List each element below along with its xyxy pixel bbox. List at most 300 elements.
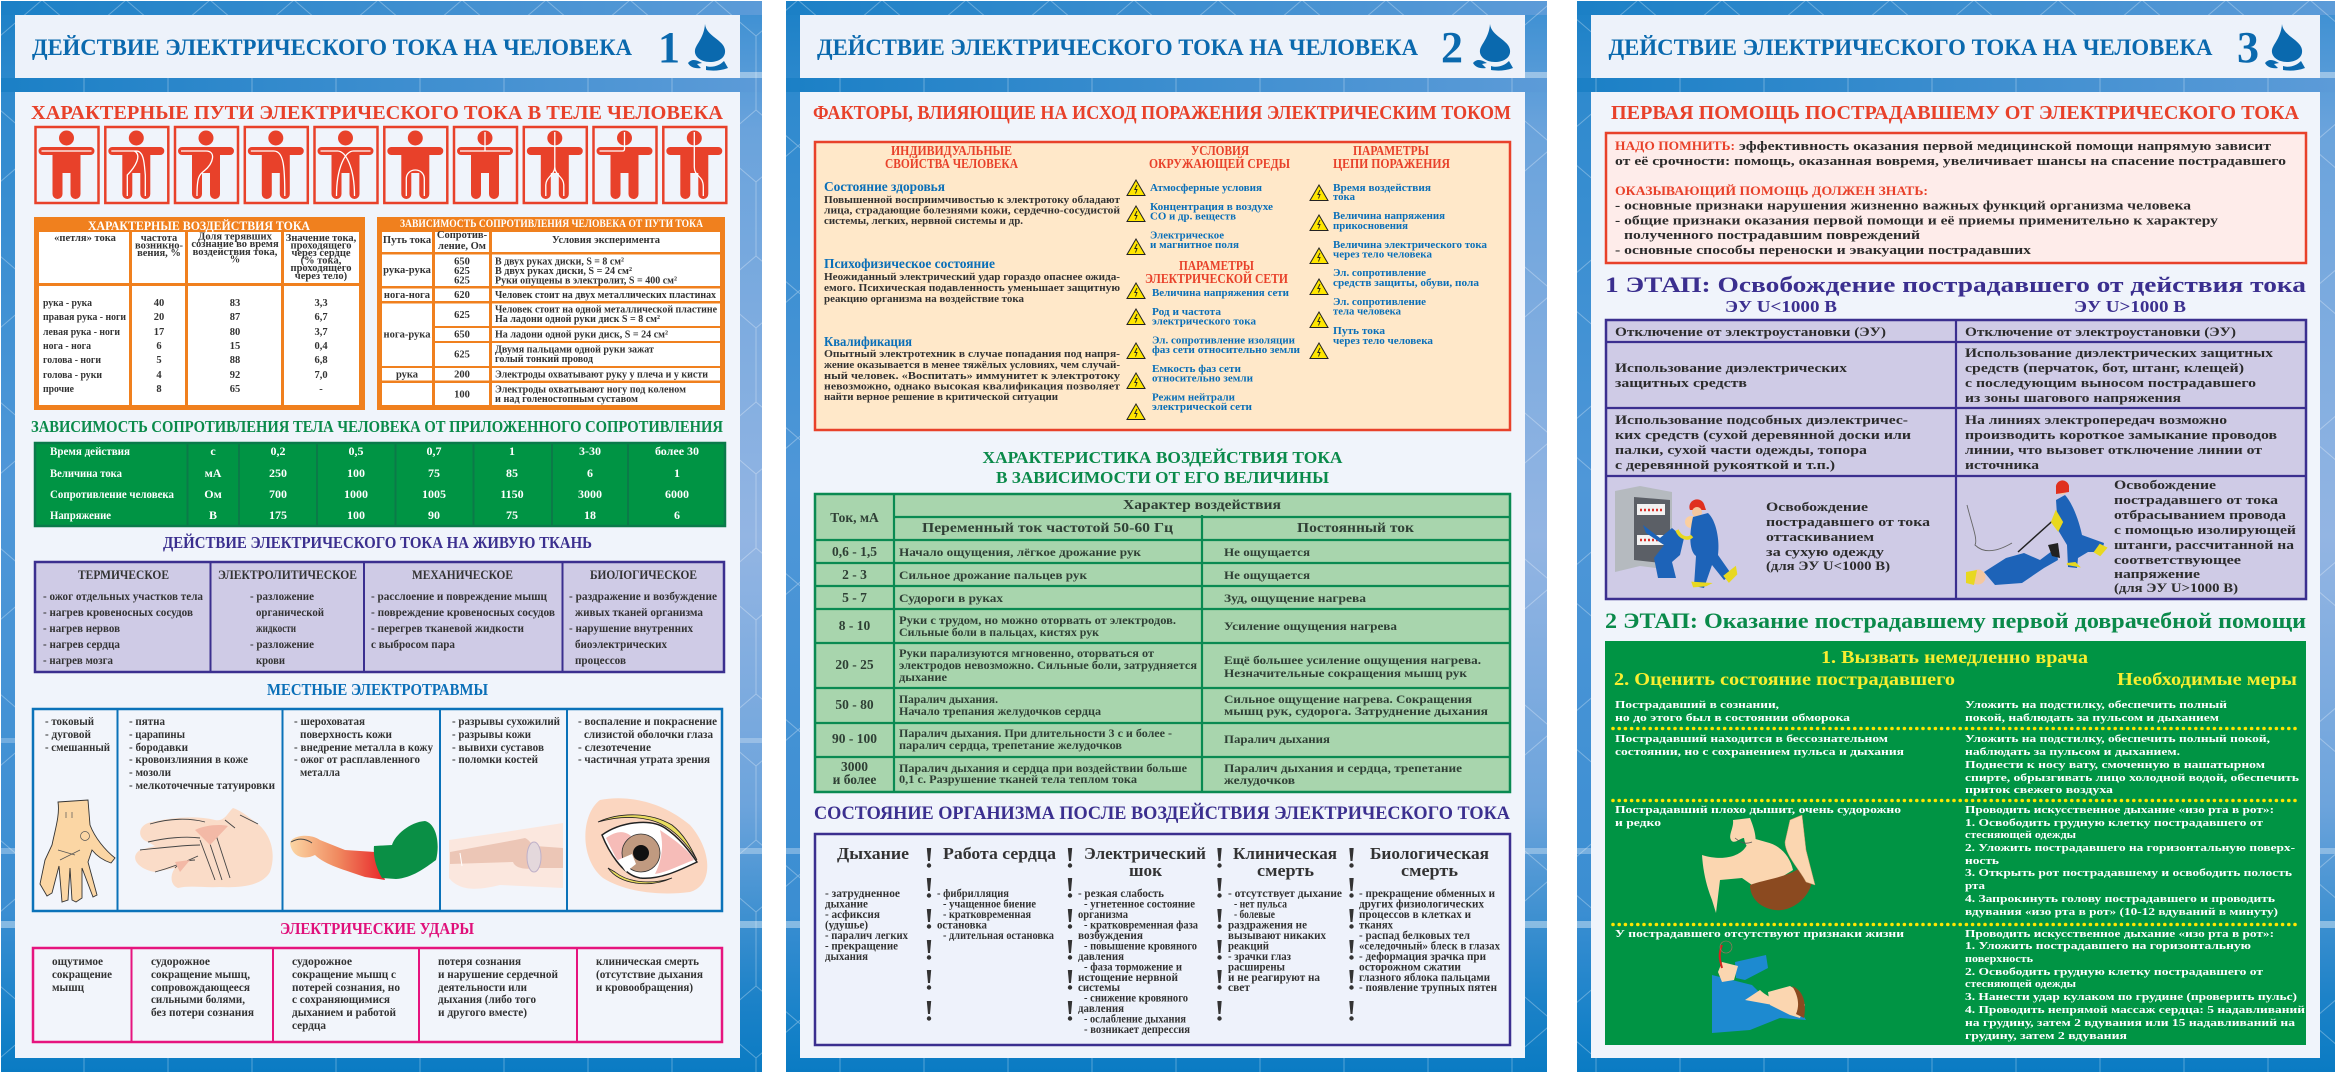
illustration: burned hand [40,800,115,902]
table: exposure time, current, resistance, voltage: Величина тока [50,466,122,480]
table: effect by current magnitude: Сильное дрожание пальцев рук [899,568,1087,582]
panel: factors box: через тело человека [1333,248,1432,260]
table: stage 1 actions: из зоны шагового напряжения [1965,390,2181,405]
heading: first aid: ПЕРВАЯ ПОМОЩЬ ПОСТРАДАВШЕМУ ОТ ЭЛЕКТРИЧЕСКОГО ТОКА [1611,102,2300,124]
table: resistance versus current path: рука [396,370,419,380]
callout: remember: эффективность оказания первой медицинской помощи напрямую зависит [1739,138,2272,153]
table: effect by current magnitude: Начало трепания желудочков сердца [899,704,1101,718]
table: exposure time, current, resistance, voltage: 85 [506,466,518,480]
table: thermal, electrolytic, mechanical, biological: - расслоение и повреждение мышц [371,591,547,603]
panel: stage 2 measures: 1. Уложить пострадавшего на горизонтальную [1965,940,2251,952]
table: characteristic effects of current [34,217,365,410]
table: thermal, electrolytic, mechanical, biological: живых тканей организма [575,607,703,619]
table: exposure time, current, resistance, voltage: 1150 [500,487,524,501]
panel: factors box: Эл. сопротивление изоляции [1152,334,1296,346]
panel: stage 2 measures: Необходимые меры [2117,669,2297,689]
icon: flame logo [688,24,728,71]
table: effect by current magnitude: 2 - 3 [842,567,867,582]
table: characteristic effects of current: 80 [230,327,240,338]
panel: organism states columns: других физиологических [1359,898,1484,910]
table: stage 1 actions: с последующим выносом пострадавшего [1965,375,2256,390]
table: local injuries with illustrations: - разрывы сухожилий [452,716,560,728]
table: characteristic effects of current: 5 [156,355,162,366]
table: characteristic effects of current: 3,7 [314,327,328,338]
illustration: dislocated joint [449,823,563,889]
panel: stage 2 measures: покой, наблюдать за пульсом и дыханием [1965,712,2220,724]
panel: organism states columns: - затрудненное [825,888,900,900]
panel: factors box: ПАРАМЕТРЫ [1179,258,1255,273]
table: effect by current magnitude: мышц рук, судорога. Затруднение дыхания [1224,704,1489,718]
panel: factors box: СВОЙСТВА ЧЕЛОВЕКА [885,156,1018,171]
table: effect by current magnitude: 50 - 80 [835,697,874,712]
table: local injuries with illustrations: - мозоли [129,767,171,779]
panel: stage 2 measures: стесняющей одежды [1965,978,2076,990]
table: characteristic effects of current: 6 [156,341,162,352]
table: stage 1 actions: Использование диэлектрических [1615,360,1848,375]
table: characteristic effects of current: Доля терявших [198,232,273,242]
panel: factors box: жение оказывается в менее тяжёлых условиях, чем случай- [824,360,1121,371]
table: local injuries with illustrations: - частичная утрата зрения [578,754,710,766]
table: local injuries with illustrations: - внедрение металла в кожу [294,742,433,754]
header title 2: ДЕЙСТВИЕ ЭЛЕКТРИЧЕСКОГО ТОКА НА ЧЕЛОВЕКА [817,35,1418,60]
table: stage 1 actions [1606,320,2306,599]
table: resistance versus current path: ление, Ом [438,241,486,252]
table: exposure time, current, resistance, voltage: 18 [584,508,596,522]
panel: factors box: Время воздействия [1333,182,1431,194]
heading: stage 1 [1605,272,2306,316]
table: electric shock severities [33,948,722,1042]
table: stage 1 actions: Отключение от электроустановки (ЭУ) [1615,324,1886,339]
table: resistance versus current path: Двумя пальцами одной руки зажат [495,344,655,356]
table: resistance versus current path: и над голеностопным суставом [495,394,638,405]
table: characteristic effects of current: воздействия тока, [193,247,278,258]
table: thermal, electrolytic, mechanical, biological: - нагрев кровеносных сосудов [43,607,193,619]
panel: stage 2 measures: спирте, обрызгивать лицо холодной водой, обеспечить [1965,772,2299,784]
table: local injuries with illustrations: - пятна [129,716,165,728]
table: resistance versus current path: На ладони одной руки диск, S = 24 см² [495,330,668,340]
panel: organism states columns: - деформация зрачка при [1359,951,1486,963]
panel: stage 2 measures: 3. Нанести удар кулаком по грудине (проверить пульс) [1965,991,2297,1003]
panel: organism states columns: - кратковременная [943,909,1031,921]
table: effect by current magnitude: Ещё большее усиление ощущения нагрева. [1224,653,1481,667]
table: effect by current magnitude: Постоянный ток [1297,520,1414,535]
table: thermal, electrolytic, mechanical, biological: - ожог отдельных участков тела [43,591,203,603]
panel: organism states columns: Работа сердца [943,844,1057,863]
header title 2 [817,23,1463,72]
table: electric shock severities: сокращение [52,969,112,981]
table: characteristic effects of current: 6,7 [314,312,328,323]
panel: factors box: Эл. сопротивление [1333,296,1426,308]
panel: stage 2 measures: 2. Уложить пострадавшего на горизонтальную поверх- [1965,842,2295,854]
callout: remember: ОКАЗЫВАЮЩИЙ ПОМОЩЬ ДОЛЖЕН ЗНАТЬ: [1615,183,1928,198]
panel: factors box: Величина электрического тока [1333,239,1487,251]
table: characteristic effects of current: 3,3 [314,298,328,309]
panel: factors box: ПАРАМЕТРЫ [1353,143,1430,158]
table: effect by current magnitude: 8 - 10 [839,618,870,633]
table: local injuries with illustrations: - поломки костей [452,754,538,766]
table: effect by current magnitude: Сильные боли в пальцах, кистях рук [899,625,1099,639]
table: resistance versus current path: Условия эксперимента [552,235,661,246]
callout: remember: - основные способы переноски и эвакуации пострадавших [1615,242,2032,257]
heading: current effect by magnitude: ХАРАКТЕРИСТИКА ВОЗДЕЙСТВИЯ ТОКА [982,448,1343,467]
table: stage 1 actions: средств (перчаток, бот, штанг, клещей) [1965,360,2244,375]
table: electric shock severities: с сохраняющимися [292,994,390,1006]
panel: factors box: прикосновения [1333,220,1408,232]
table: resistance versus current path: 625 [454,266,470,277]
panel: factors box: Неожиданный электрический удар гораздо опаснее ожида- [824,272,1121,283]
table: local injuries with illustrations: - царапины [129,729,185,741]
table: characteristic effects of current: через тело) [295,271,348,282]
table: electric shock severities: и нарушение сердечной [438,969,558,981]
table: effect by current magnitude: Паралич дыхания. При длительности 3 с и более - [899,726,1172,740]
table: characteristic effects of current: 0,4 [314,341,328,352]
panel: organism states columns: смерть [1257,861,1314,880]
table: thermal, electrolytic, mechanical, biological: жидкости [256,623,296,635]
table: stage 1 actions: пострадавшего от тока [2114,492,2279,507]
table: characteristic effects of current: 88 [230,355,240,366]
table: effect by current magnitude: Переменный ток частотой 50-60 Гц [922,520,1173,535]
table: exposure time, current, resistance, voltage: 6000 [665,487,689,501]
table: electric shock severities: сокращение мышц с [292,969,396,981]
table: resistance versus current path: Руки опущены в электролит, S = 400 см² [495,276,677,286]
table: effect by current magnitude: Руки парализуются мгновенно, оторваться от [899,646,1154,660]
header title 1: 1 [658,23,680,72]
table: effect by current magnitude: Паралич дыхания и сердца при воздействии больше [899,761,1188,775]
table: electric shock severities: сильными болями, [151,994,245,1006]
panel: factors box: Электрическое [1150,230,1224,242]
table: exposure time, current, resistance, voltage: с [210,444,216,458]
table: characteristic effects of current: правая рука - ноги [43,312,126,323]
table: exposure time, current, resistance, voltage: 250 [269,466,287,480]
panel: factors box: Род и частота [1152,306,1221,318]
table: exposure time, current, resistance, voltage: 3000 [578,487,602,501]
panel: organism states columns: расширены [1228,962,1285,974]
table: effect by current magnitude: 0,6 - 1,5 [832,544,877,559]
table: characteristic effects of current: проходящего [291,240,351,252]
panel: stage 2 measures: рта [1965,880,1986,892]
table: resistance versus current path: голый тонкий провод [495,354,594,365]
panel: stage 2 measures: Проводить искусственное дыхание «изо рта в рот»: [1965,804,2274,816]
panel: stage 2 measures: наблюдать за пульсом и дыханием. [1965,746,2180,758]
table: stage 1 actions: (для ЭУ U<1000 В) [1766,558,1890,573]
panel: factors box: тела человека [1333,306,1401,318]
panel: organism states columns: реакций [1228,940,1269,952]
panel: stage 2 measures: 4. Запрокинуть голову пострадавшего и проводить [1965,893,2275,905]
table: thermal, electrolytic, mechanical, biological: - нарушение внутренних [569,623,693,635]
panel: organism states columns: глазного яблока пальцами [1359,972,1490,984]
illustration: burned arm in green glove [290,821,438,880]
panel: factors box: электрической сети [1152,401,1253,413]
table: characteristic effects of current: проходящего [291,263,351,274]
panel: organism states columns: организма [1078,909,1128,921]
table: characteristic effects of current: вения, % [137,248,181,259]
callout: remember: - основные признаки нарушения жизненно важных функций организма человека [1615,198,2192,212]
panel: stage 2 measures: но до этого был в состоянии обморока [1615,712,1851,724]
panel: factors box: ОКРУЖАЮЩЕЙ СРЕДЫ [1149,156,1291,171]
panel: stage 2 measures: и редко [1615,817,1662,829]
table: resistance versus current path: Путь тока [383,235,432,246]
table: effect by current magnitude: Характер воздействия [1123,497,1281,512]
table: local injuries with illustrations: - слезотечение [578,742,651,754]
poster 3: first aid [1577,1,2335,1072]
table: stage 1 actions: соответствующее [2114,552,2241,567]
panel: factors box: Психофизическое состояние [824,257,995,272]
table: exposure time, current, resistance, voltage: 0,2 [270,444,286,458]
heading: current effect by magnitude: В ЗАВИСИМОСТИ ОТ ЕГО ВЕЛИЧИНЫ [996,468,1329,487]
panel: organism states columns: «селедочный» блеск в глазах [1359,940,1500,952]
table: electric shock severities: сокращение мышц, [151,969,250,981]
table: exposure time, current, resistance, voltage: Время действия [50,444,130,458]
header title 3: 3 [2237,23,2259,72]
panel: organism states columns: Биологическая [1370,844,1489,863]
table: stage 1 actions: На линиях электропередач возможно [1965,412,2227,427]
table: local injuries with illustrations: - токовый [45,716,94,728]
table: exposure time, current, resistance, voltage: 1005 [422,487,446,501]
table: exposure time, current, resistance, voltage: 90 [428,508,440,522]
heading: paths of current: ХАРАКТЕРНЫЕ ПУТИ ЭЛЕКТРИЧЕСКОГО ТОКА В ТЕЛЕ ЧЕЛОВЕКА [31,102,724,124]
table: characteristic effects of current: прочие [43,384,74,395]
table: thermal, electrolytic, mechanical, biological: ТЕРМИЧЕСКОЕ [78,567,169,582]
panel: organism states columns: Дыхание [837,844,909,863]
table: stage 1 actions: пострадавшего от тока [1766,514,1931,529]
table: characteristic effects of current: 17 [154,327,164,338]
table: characteristic effects of current: (% тока, [301,256,342,266]
panel: factors box: емого. Психическая подавленность уменьшает защитную [824,283,1120,294]
illustration: mouth-to-mouth rescue [1702,815,1815,913]
table: local injuries with illustrations: - воспаление и покраснение [578,716,717,728]
table: stage 1 actions: напряжение [2114,566,2200,581]
table: stage 1 actions: Использование подсобных диэлектричес- [1615,412,1908,427]
panel: stage 2 measures: Уложить на подстилку, обеспечить полный покой, [1965,733,2270,745]
icons: exclamation mark dividers [927,848,1354,1021]
panel: factors box: средств защиты, обуви, пола [1333,277,1480,289]
illustration: pulling victim from switchboard [1615,486,1736,588]
callout: remember: НАДО ПОМНИТЬ: [1615,138,1735,153]
heading: stage 1: ЭУ U>1000 В [2074,297,2186,316]
table: stage 1 actions: палки, сухой части одежды, топора [1615,442,1868,457]
panel: organism states columns: возбуждения [1078,930,1143,942]
heading: electric shocks: ЭЛЕКТРИЧЕСКИЕ УДАРЫ [280,919,474,938]
icon: flame logo [2265,24,2305,71]
table: effect by current magnitude: Судороги в руках [899,591,1003,605]
panel: factors box: Величина напряжения [1333,210,1445,222]
illustration: chest compressions [1712,941,1806,1033]
table: stage 1 actions: Отключение от электроустановки (ЭУ) [1965,324,2236,339]
table: effect by current magnitude: электродов невозможно. Сильные боли, затрудняется [899,658,1198,672]
panel: factors box: ный человек. «Воспитать» иммунитет к электротоку [824,371,1121,382]
table: stage 1 actions: с помощью изолирующей [2114,522,2297,537]
panel: factors box: Емкость фаз сети [1152,363,1242,375]
table: effect by current magnitude: Паралич дыхания. [899,692,998,706]
table: exposure time, current, resistance, voltage: более 30 [655,444,699,458]
table: effect by current magnitude: Не ощущается [1224,545,1311,559]
table: exposure time, current, resistance, voltage: 6 [587,466,593,480]
table: effect by current magnitude: Сильное ощущение нагрева. Сокращения [1224,692,1473,706]
header title 3: ДЕЙСТВИЕ ЭЛЕКТРИЧЕСКОГО ТОКА НА ЧЕЛОВЕКА [1608,35,2213,60]
panel: factors box [815,142,1510,430]
table: exposure time, current, resistance, voltage: 75 [428,466,440,480]
table: thermal, electrolytic, mechanical, biological: крови [256,655,285,667]
table: effect by current magnitude: паралич сердца, трепетание желудочков [899,738,1123,752]
table: stage 1 actions: защитных средств [1615,375,1747,390]
panel: stage 2 measures: Уложить на подстилку, обеспечить полный [1965,699,2228,711]
panel: factors box: Квалификация [824,335,912,350]
panel: factors box: невозможно, однако высокая квалификация позволяет [824,382,1121,392]
panel: factors box: относительно земли [1152,372,1254,384]
panel: organism states columns: смерть [1401,861,1458,880]
table: resistance versus current path [377,217,725,410]
table: exposure time, current, resistance, voltage: Напряжение [50,508,112,522]
panel: organism states columns: - фибрилляция [937,888,1009,900]
table: stage 1 actions: источника [1965,457,2040,472]
table: electric shock severities: дыханием и работой [292,1007,396,1019]
panel: factors box: тока [1333,191,1355,203]
table: exposure time, current, resistance, voltage: мА [205,466,222,480]
heading: factors: ФАКТОРЫ, ВЛИЯЮЩИЕ НА ИСХОД ПОРАЖЕНИЯ ЭЛЕКТРИЧЕСКИМ ТОКОМ [813,102,1511,124]
panel: organism states columns: - отсутствует дыхание [1228,888,1342,900]
table: exposure time, current, resistance, voltage: Сопротивление человека [50,487,174,501]
panel: stage 2 measures: 1. Освободить грудную клетку пострадавшего от [1965,817,2264,829]
panel: organism states columns: вызывают никаких [1228,930,1326,942]
heading: state of the organism: СОСТОЯНИЕ ОРГАНИЗМА ПОСЛЕ ВОЗДЕЙСТВИЯ ЭЛЕКТРИЧЕСКОГО ТОКА [814,802,1510,824]
panel: organism states columns: раздражения не [1228,920,1307,932]
table: local injuries with illustrations: - ожог от расплавленного [294,754,420,766]
panel: organism states columns: - паралич легких [825,930,908,942]
heading: stage 2: 2 ЭТАП: Оказание пострадавшему первой доврачебной помощи [1605,608,2306,633]
panel: stage 2 measures: 4. Проводить непрямой массаж сердца: 5 надавливаний [1965,1004,2306,1016]
panel: organism states columns: - распад белковых тел [1359,930,1471,942]
table: resistance versus current path: В двух руках диски, S = 8 см² [495,256,624,268]
table: characteristic effects of current: сознание во время [191,239,279,250]
table: characteristic effects of current: нога - нога [43,341,92,352]
panel: organism states columns: - возникает депрессия [1084,1024,1190,1036]
poster 2: factors and characteristics [786,1,1547,1072]
table: stage 1 actions: (для ЭУ U>1000 В) [2114,580,2238,595]
header title 2: 2 [1441,23,1463,72]
table: characteristic effects of current: Значение тока, [286,233,357,244]
table: exposure time, current, resistance, voltage: 100 [347,508,365,522]
table: effect by current magnitude: 20 - 25 [835,657,874,672]
table: resistance versus current path: 625 [454,310,470,321]
table: resistance versus current path: Сопротив- [437,230,488,241]
table: resistance versus current path: Электроды охватывают ногу под коленом [495,384,686,396]
table: characteristic effects of current: левая рука - ноги [43,327,120,338]
panel: organism states columns: давления [1078,1003,1124,1015]
table: thermal, electrolytic, mechanical, biological: - нагрев мозга [43,655,113,667]
panel: factors box: Состояние здоровья [824,180,945,195]
table: resistance versus current path: рука-рука [383,265,432,276]
table: electric shock severities: мышц [52,982,84,994]
table: thermal, electrolytic, mechanical, biological: процессов [575,655,626,667]
panel: stage 2 measures: приток свежего воздуха [1965,784,2114,796]
table: exposure time, current, resistance, voltage: 700 [269,487,287,501]
panel: factors box: Режим нейтрали [1152,392,1236,404]
panel: organism states columns: Клиническая [1233,844,1337,863]
table: thermal, electrolytic, mechanical, biological: БИОЛОГИЧЕСКОЕ [590,567,697,582]
panel: organism states columns: системы [1078,982,1120,994]
table: stage 1 actions: оттаскиванием [1766,529,1874,544]
panel: factors box: ЦЕПИ ПОРАЖЕНИЯ [1333,156,1450,171]
table: thermal, electrolytic, mechanical, biological: - нагрев нервов [43,623,120,635]
table: resistance versus current path: В двух руках диски, S = 24 см² [495,266,632,277]
icons: warning triangles [1127,180,1328,420]
table: electric shock severities: и другого вместе) [438,1007,527,1019]
table: thermal, electrolytic, mechanical, biological: биоэлектрических [575,639,667,651]
panel: organism states columns: истощение нервной [1078,972,1178,984]
table: stage 1 actions: ких средств (сухой деревянной доски или [1615,427,1912,442]
panel: factors box: Повышенной восприимчивостью к электротоку обладают [824,195,1121,206]
table: exposure time, current, resistance, voltage: 3-30 [579,444,601,458]
table: local injuries with illustrations: - смешанный [45,742,110,754]
table: characteristic effects of current: возникно- [135,240,184,252]
table: exposure time, current, resistance, voltage: 6 [674,508,680,522]
table: characteristic effects of current: 6,8 [314,355,328,366]
table: effect by current magnitude: Начало ощущения, лёгкое дрожание рук [899,545,1141,559]
table: electric shock severities: ощутимое [52,956,103,968]
header title 1 [32,23,680,72]
panel: factors box: через тело человека [1333,335,1433,347]
table: local injuries with illustrations: - дуговой [45,729,91,741]
table: stage 1 actions: линии, что вызовет отключение линии от [1965,442,2263,457]
table: resistance versus current path: На ладони одной руки диск S = 8 см² [495,314,660,325]
table: local injuries with illustrations: - вывихи суставов [452,742,544,754]
panel: organism states columns: шок [1129,861,1162,880]
callout: remember: полученного пострадавшим повреждений [1624,227,1921,242]
panel: factors box: и магнитное поля [1150,239,1239,251]
panel: stage 2 measures: ность [1965,855,1999,867]
table: resistance versus current path: 650 [454,256,470,268]
table: effect by current magnitude: 90 - 100 [832,731,877,746]
panel: organism states columns: - длительная остановка [943,930,1054,942]
table: exposure time, current, resistance, voltage: 0,7 [426,444,442,458]
table: local injuries with illustrations: слизистой оболочки глаза [584,729,713,741]
table: electric shock severities: дыхания (либо того [438,994,536,1006]
heading: stage 1: ЭУ U<1000 В [1725,297,1837,316]
panel: organism states columns: - нет пульса [1234,898,1287,910]
panel: stage 2 measures: поверхность [1965,953,2033,965]
table: exposure time, current, resistance, voltage: 100 [347,466,365,480]
table: thermal, electrolytic, mechanical, biological: - разложение [250,639,314,651]
panel: organism states columns [815,834,1510,1045]
table: characteristic effects of current: % [230,254,240,266]
table: thermal, electrolytic, mechanical, biological: - разложение [250,591,314,603]
panel: organism states columns: - зрачки глаз [1228,951,1291,963]
table: effect by current magnitude: Незначительные сокращения мышц рук [1224,666,1467,680]
illustration: hand with electric marks [135,808,273,888]
panel: stage 2 measures: грудину, затем 2 вдувания [1965,1030,2127,1042]
panel: organism states columns: давления [1078,951,1124,963]
table: resistance versus current path: 625 [454,350,470,360]
panel: factors box: Эл. сопротивление [1333,267,1426,279]
panel: factors box: Концентрация в воздухе [1150,201,1273,213]
table: thermal, electrolytic, mechanical, biological: органической [256,607,324,619]
panel: organism states columns: - угнетенное состояние [1084,898,1195,910]
table: characteristic effects of current: 4 [156,370,162,381]
table: characteristic effects of current: ХАРАКТЕРНЫЕ ВОЗДЕЙСТВИЯ ТОКА [88,218,311,233]
table: effect by current magnitude: Паралич дыхания [1224,732,1331,746]
table: effect by current magnitude: 3000 [841,759,868,774]
panel: stage 2 measures: вдувания «изо рта в рот» (10-12 вдуваний в минуту) [1965,906,2278,918]
illustration: removing wire with insulating rod [1966,480,2106,585]
table: characteristic effects of current: 20 [154,312,164,323]
callout: remember: - общие признаки оказания первой помощи и её приемы применительно к характеру [1615,212,2219,228]
header title 3 [1608,23,2259,72]
panel: stage 2 measures: 3. Открыть рот пострадавшему и освободить полость [1965,867,2292,879]
poster 1: characteristic paths and effects of current [1,1,762,1072]
panel: stage 2 measures: Пострадавший в сознании, [1615,699,1779,711]
callout: remember: от её срочности: помощь, оказанная вовремя, увеличивает шансы на спасение пострадавшего [1615,153,2286,168]
panel: organism states columns: - асфиксия [825,909,880,921]
